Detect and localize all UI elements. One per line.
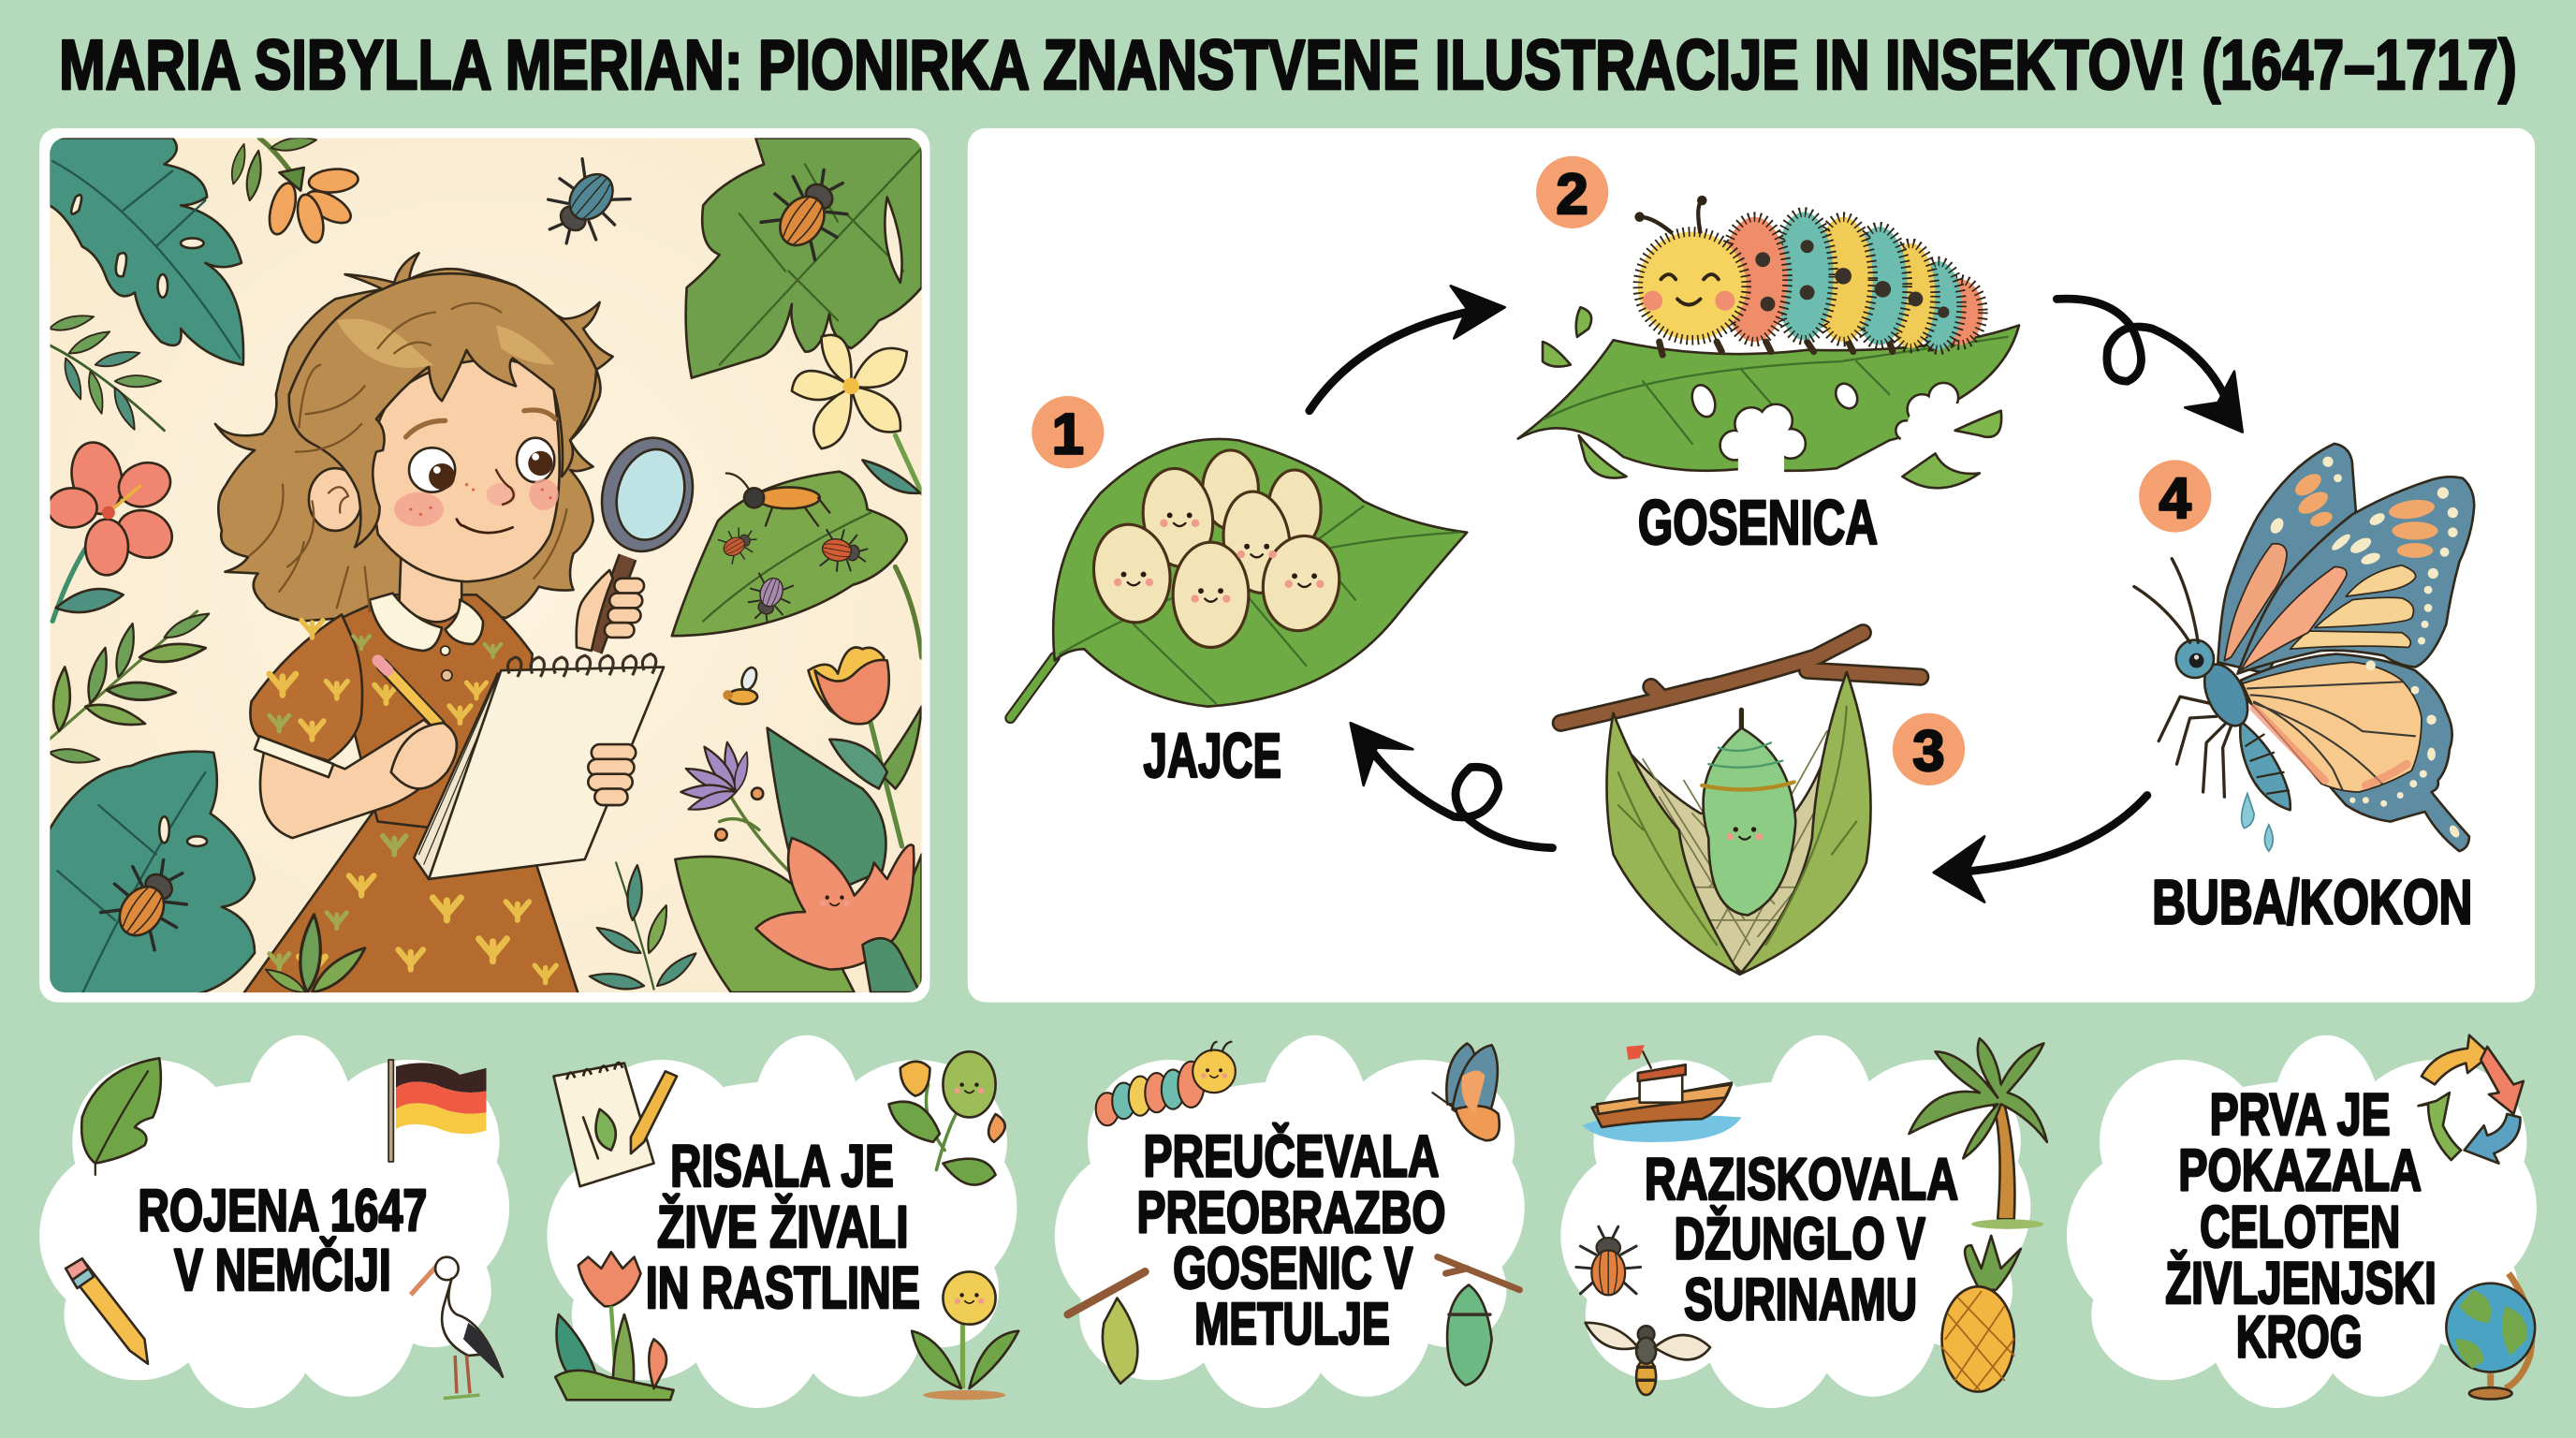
cloud 4: explored Suriname — [1560, 1035, 2047, 1408]
left arm — [255, 720, 457, 838]
text: PREOBRAZBO — [1137, 1180, 1445, 1245]
arrow 1 to 2 — [1310, 286, 1505, 411]
upper hand — [577, 570, 644, 651]
blue beetle — [547, 157, 632, 245]
long-horned bug — [726, 473, 829, 526]
text: ROJENA 1647 — [138, 1179, 427, 1244]
cloud 2: drew live animals — [547, 1035, 1018, 1408]
collar — [370, 594, 483, 651]
tulip — [809, 648, 922, 846]
eyes — [409, 438, 554, 492]
icon: globe — [2446, 1273, 2535, 1399]
icon: bee — [1586, 1323, 1710, 1395]
lower left branch — [49, 609, 212, 766]
text — [2165, 1082, 2437, 1371]
front plant — [263, 914, 371, 999]
purple flower — [681, 741, 788, 871]
leaf bites — [1720, 383, 1969, 479]
icon: cycle arrows — [2419, 1035, 2524, 1164]
pencil — [378, 661, 439, 725]
ear — [309, 468, 361, 531]
stage 4 butterfly — [2134, 444, 2474, 851]
icon: palm tree — [1909, 1038, 2047, 1229]
caterpillar legs — [1660, 342, 1932, 355]
icon: tulip plant — [555, 1252, 674, 1400]
arrow 4 to 3 — [1934, 795, 2147, 902]
stage 1 eggs on leaf — [1010, 439, 1467, 718]
text: ŽIVE ŽIVALI — [657, 1194, 909, 1260]
leaf crumbs — [1543, 307, 2001, 488]
sleeve — [250, 614, 362, 761]
back wing — [2217, 444, 2356, 674]
small bugs — [717, 521, 762, 565]
notebook — [391, 654, 664, 879]
badge 4 — [2139, 460, 2211, 533]
small teal plant — [589, 862, 700, 992]
hammock net — [1618, 674, 1848, 973]
top-right monstera leaf — [686, 138, 922, 378]
text: DŽUNGLO V — [1674, 1205, 1925, 1271]
icon: sketchbook with pencil — [553, 1063, 677, 1186]
icon: boat — [1582, 1045, 1741, 1142]
wrapping leaves — [1606, 713, 1740, 975]
brows, nose, mouth, cheeks — [394, 410, 559, 533]
arrow 3 to 1 — [1351, 723, 1553, 848]
hair highlight — [337, 317, 550, 368]
front wing — [2237, 477, 2474, 674]
text — [1645, 1147, 1958, 1332]
icon: leaf — [81, 1058, 161, 1175]
cloud 3: studied metamorphosis — [1055, 1035, 1525, 1408]
badge 3: 3 — [1912, 719, 1945, 784]
dress top — [342, 594, 533, 838]
text: POKAZALA — [2178, 1138, 2422, 1204]
hair strands — [250, 303, 567, 611]
cloud 1: born — [39, 1035, 509, 1408]
butterfly body — [2240, 721, 2291, 810]
badge 2 — [1536, 156, 1608, 228]
top-left monstera leaf — [50, 138, 243, 365]
text: METULJE — [1194, 1292, 1390, 1357]
text: RISALA JE — [670, 1134, 894, 1199]
label jajce: JAJCE — [1144, 722, 1281, 791]
icon: German flag — [388, 1060, 487, 1162]
badge 1 — [1032, 396, 1104, 468]
badge 2: 2 — [1557, 162, 1588, 227]
icon: pencil — [66, 1258, 148, 1364]
right hand — [588, 744, 636, 805]
writing hand — [391, 723, 457, 788]
caterpillar body — [1638, 212, 1983, 350]
icon: chrysalis on branch — [1438, 1257, 1519, 1386]
text — [1137, 1123, 1445, 1357]
text: KROG — [2236, 1305, 2363, 1371]
badge 3 — [1893, 713, 1965, 785]
stage 2 caterpillar on leaf — [1518, 196, 2019, 488]
hair — [215, 253, 613, 621]
label buba kokon: BUBA/KOKON — [2152, 868, 2472, 937]
text: PREUČEVALA — [1144, 1123, 1439, 1190]
neck — [399, 559, 461, 622]
panel: portrait of Maria in jungle — [39, 128, 929, 1003]
bottom-right foliage and coral flower — [675, 728, 922, 992]
stage 3 pupa — [1560, 633, 1921, 975]
lower wing — [2241, 654, 2469, 851]
text: PRVA JE — [2210, 1082, 2391, 1148]
icon: cocoon on branch — [1068, 1271, 1145, 1384]
icon: caterpillar — [1096, 1050, 1236, 1125]
dress buttons — [441, 646, 452, 681]
text: V NEMČIJI — [174, 1237, 391, 1303]
text: SURINAMU — [1684, 1267, 1917, 1332]
badge 1: 1 — [1052, 402, 1084, 466]
yellow plumeria flower — [792, 335, 907, 448]
icon: stork — [411, 1257, 503, 1399]
text: RAZISKOVALA — [1645, 1147, 1958, 1212]
icon: butterfly — [1432, 1043, 1500, 1140]
caterpillar face — [1201, 1042, 1232, 1078]
right leaf with bugs — [672, 472, 922, 657]
panel: life cycle — [968, 128, 2535, 1003]
text: GOSENIC V — [1173, 1236, 1412, 1301]
orange beetle bottom — [99, 858, 189, 952]
front hair — [289, 273, 596, 547]
text: CELOTEN — [2200, 1195, 2400, 1260]
arrow 2 to 4 — [2056, 299, 2243, 433]
dress skirt — [243, 805, 578, 994]
label gosenica: GOSENICA — [1638, 489, 1878, 558]
dress leaf pattern — [270, 621, 556, 983]
coral flower — [48, 437, 179, 621]
plumeria stem and leaf — [862, 435, 922, 493]
chrysalis — [1702, 710, 1795, 916]
text — [646, 1134, 920, 1321]
icon: pea plant — [889, 1051, 1005, 1185]
icon: sunflower plant — [912, 1271, 1018, 1400]
badge 4: 4 — [2159, 466, 2191, 531]
top orange flower — [228, 134, 359, 245]
magnifying glass — [577, 428, 705, 651]
caterpillar spots and face — [1755, 240, 1949, 318]
face — [373, 359, 560, 581]
icon: ladybug — [1576, 1226, 1641, 1295]
text: ŽIVLJENJSKI — [2165, 1250, 2437, 1316]
text — [138, 1179, 427, 1303]
left fern — [48, 311, 165, 432]
icon: pineapple — [1942, 1236, 2021, 1392]
bottom-left monstera leaf — [50, 752, 255, 994]
small bee — [723, 666, 759, 704]
text: IN RASTLINE — [646, 1255, 920, 1321]
orange beetle on leaf — [759, 169, 849, 262]
cloud 5: showed life cycle — [2067, 1035, 2537, 1408]
